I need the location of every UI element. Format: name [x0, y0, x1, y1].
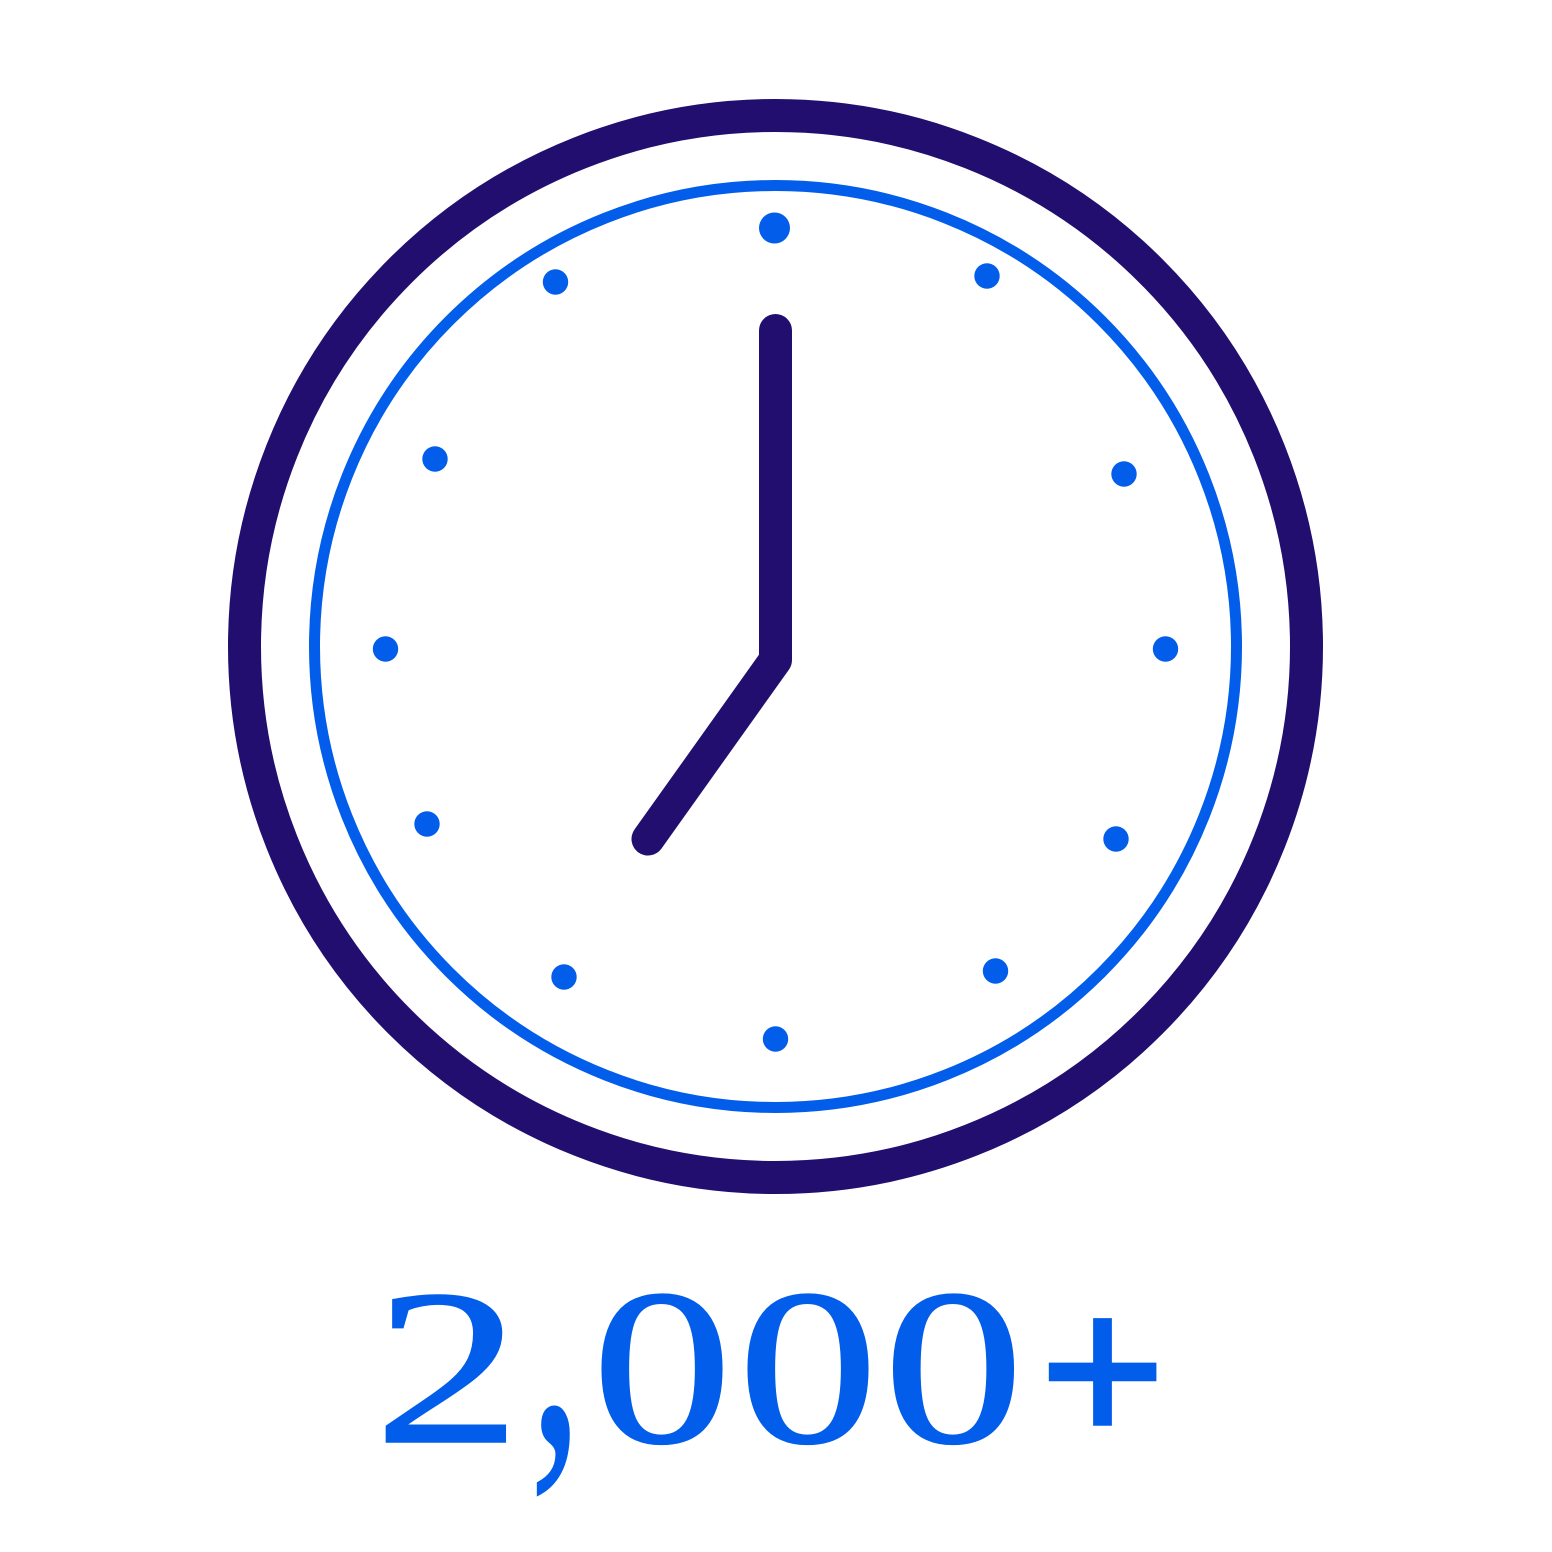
icon: clock [244, 116, 1306, 1178]
clock hands [648, 330, 776, 839]
statistic: 2,000+ [374, 1131, 1163, 1518]
clock outer ring [244, 116, 1306, 1178]
statistic: 2,000+: 0 [592, 1244, 732, 1490]
statistic: 2,000+: 0 [738, 1244, 878, 1490]
hour markers [373, 212, 1178, 1052]
statistic: 2,000+: + [1042, 1253, 1163, 1490]
clock inner ring [314, 186, 1236, 1108]
statistic: 2,000+: 0 [884, 1244, 1023, 1490]
statistic: 2,000+: 2 [374, 1244, 521, 1490]
statistic: 2,000+: , [529, 1131, 583, 1518]
